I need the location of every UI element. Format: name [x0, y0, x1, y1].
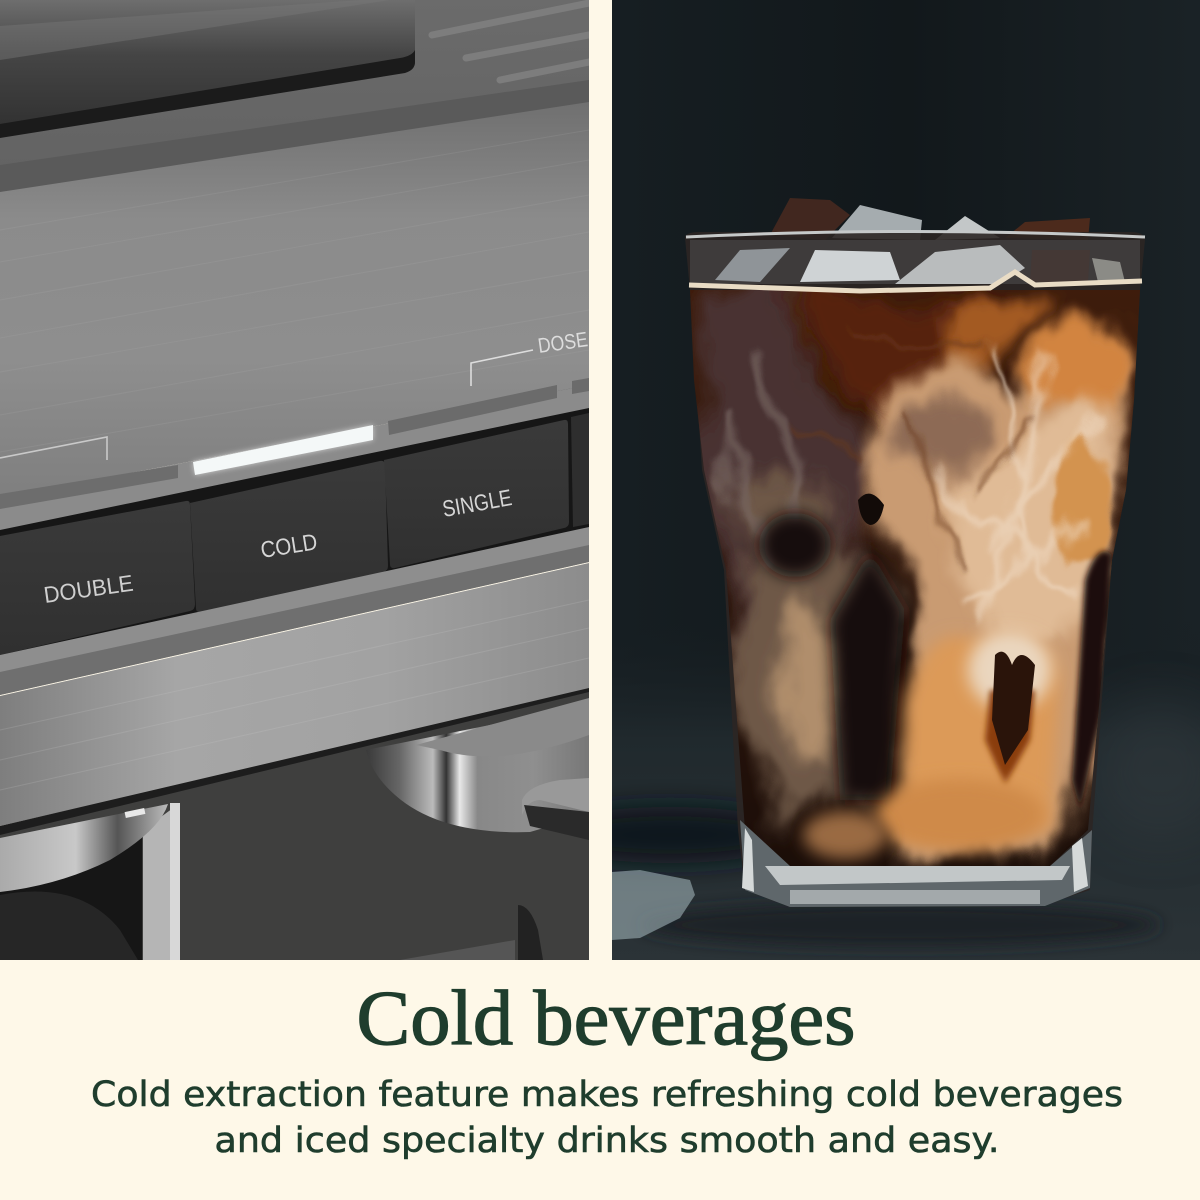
dark backdrop [612, 0, 1200, 735]
body text [91, 1075, 1123, 1161]
ice inside rim [690, 240, 1140, 284]
left bracket label [0, 437, 107, 460]
steel pillar [143, 810, 170, 960]
water tank [0, 15, 415, 138]
button: cold: COLD [259, 528, 319, 563]
lower brushed panel [0, 563, 589, 826]
button: next [571, 413, 589, 527]
body text: and iced specialty drinks smooth and easy. [214, 1121, 1000, 1161]
button: single: SINGLE [440, 484, 514, 522]
glass body [685, 232, 1145, 907]
glass rim [686, 232, 1145, 237]
steam knob [400, 905, 543, 960]
button: cold [190, 461, 388, 612]
button: double: DOUBLE [42, 570, 135, 608]
panel: iced coffee photo [612, 0, 1200, 960]
right group head [366, 698, 589, 832]
left dark basket [0, 830, 142, 960]
lower fascia strip [0, 385, 589, 535]
dose bracket label: DOSE [536, 328, 589, 358]
dark lower panel [0, 690, 589, 960]
machine top surface [0, 0, 589, 400]
slate table [612, 708, 1200, 960]
brushed metal fascia [0, 100, 589, 498]
panel: machine control close-up [0, 0, 589, 960]
metal rail [0, 527, 589, 695]
under-edge trim [0, 688, 589, 835]
indicator bar: single (off) [388, 385, 557, 435]
body text: Cold extraction feature makes refreshing cold beverages [91, 1075, 1123, 1115]
ice chunk on table [612, 870, 695, 940]
dose bracket label [471, 328, 589, 386]
button: single [384, 420, 569, 568]
ice cubes above rim [770, 198, 1090, 240]
crema line [689, 272, 1142, 291]
portafilter handle [522, 778, 589, 840]
coffee and milk swirl [680, 285, 1150, 875]
indicator bar: cold (lit) [193, 425, 373, 475]
button row backing [0, 408, 589, 660]
left group head [0, 804, 168, 892]
drip ridges [432, 3, 589, 80]
button: double [0, 501, 195, 655]
indicator bar: next (off) [572, 378, 589, 394]
indicator bar: double (off) [0, 465, 178, 509]
heading: Cold beverages [356, 974, 856, 1061]
glass base [740, 820, 1092, 907]
